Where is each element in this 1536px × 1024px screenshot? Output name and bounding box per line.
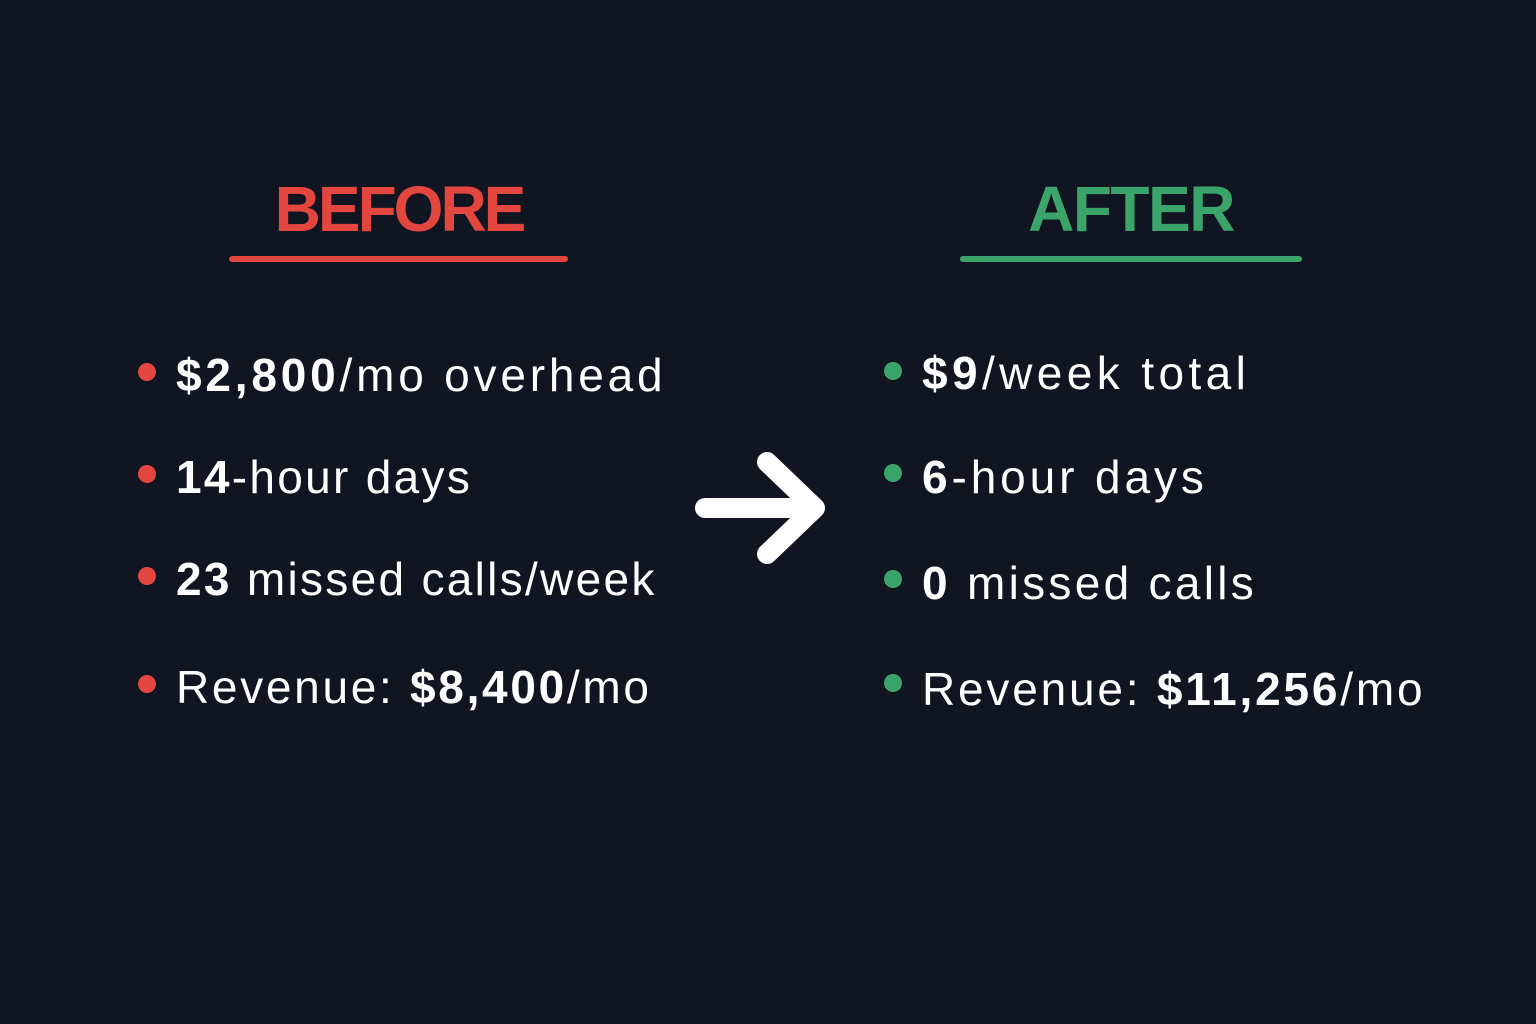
item: revenue: Revenue: $11,256/mo [922,663,1425,715]
arrow [695,452,825,564]
item: overhead: $2,800/mo overhead [176,349,666,401]
panel: after list [884,347,1425,715]
item: missed calls: 23 missed calls/week [176,553,657,605]
heading: before: BEFORE [275,173,523,245]
item: missed calls: 0 missed calls [922,557,1257,609]
panel: before list [138,349,666,713]
underline: after [960,256,1302,262]
heading: after: AFTER [1028,173,1234,245]
item: hours: 6-hour days [922,451,1208,503]
item: cost: $9/week total [922,347,1250,399]
underline: before [229,256,568,262]
item: revenue: Revenue: $8,400/mo [176,661,652,713]
item: hours: 14-hour days [176,451,472,503]
